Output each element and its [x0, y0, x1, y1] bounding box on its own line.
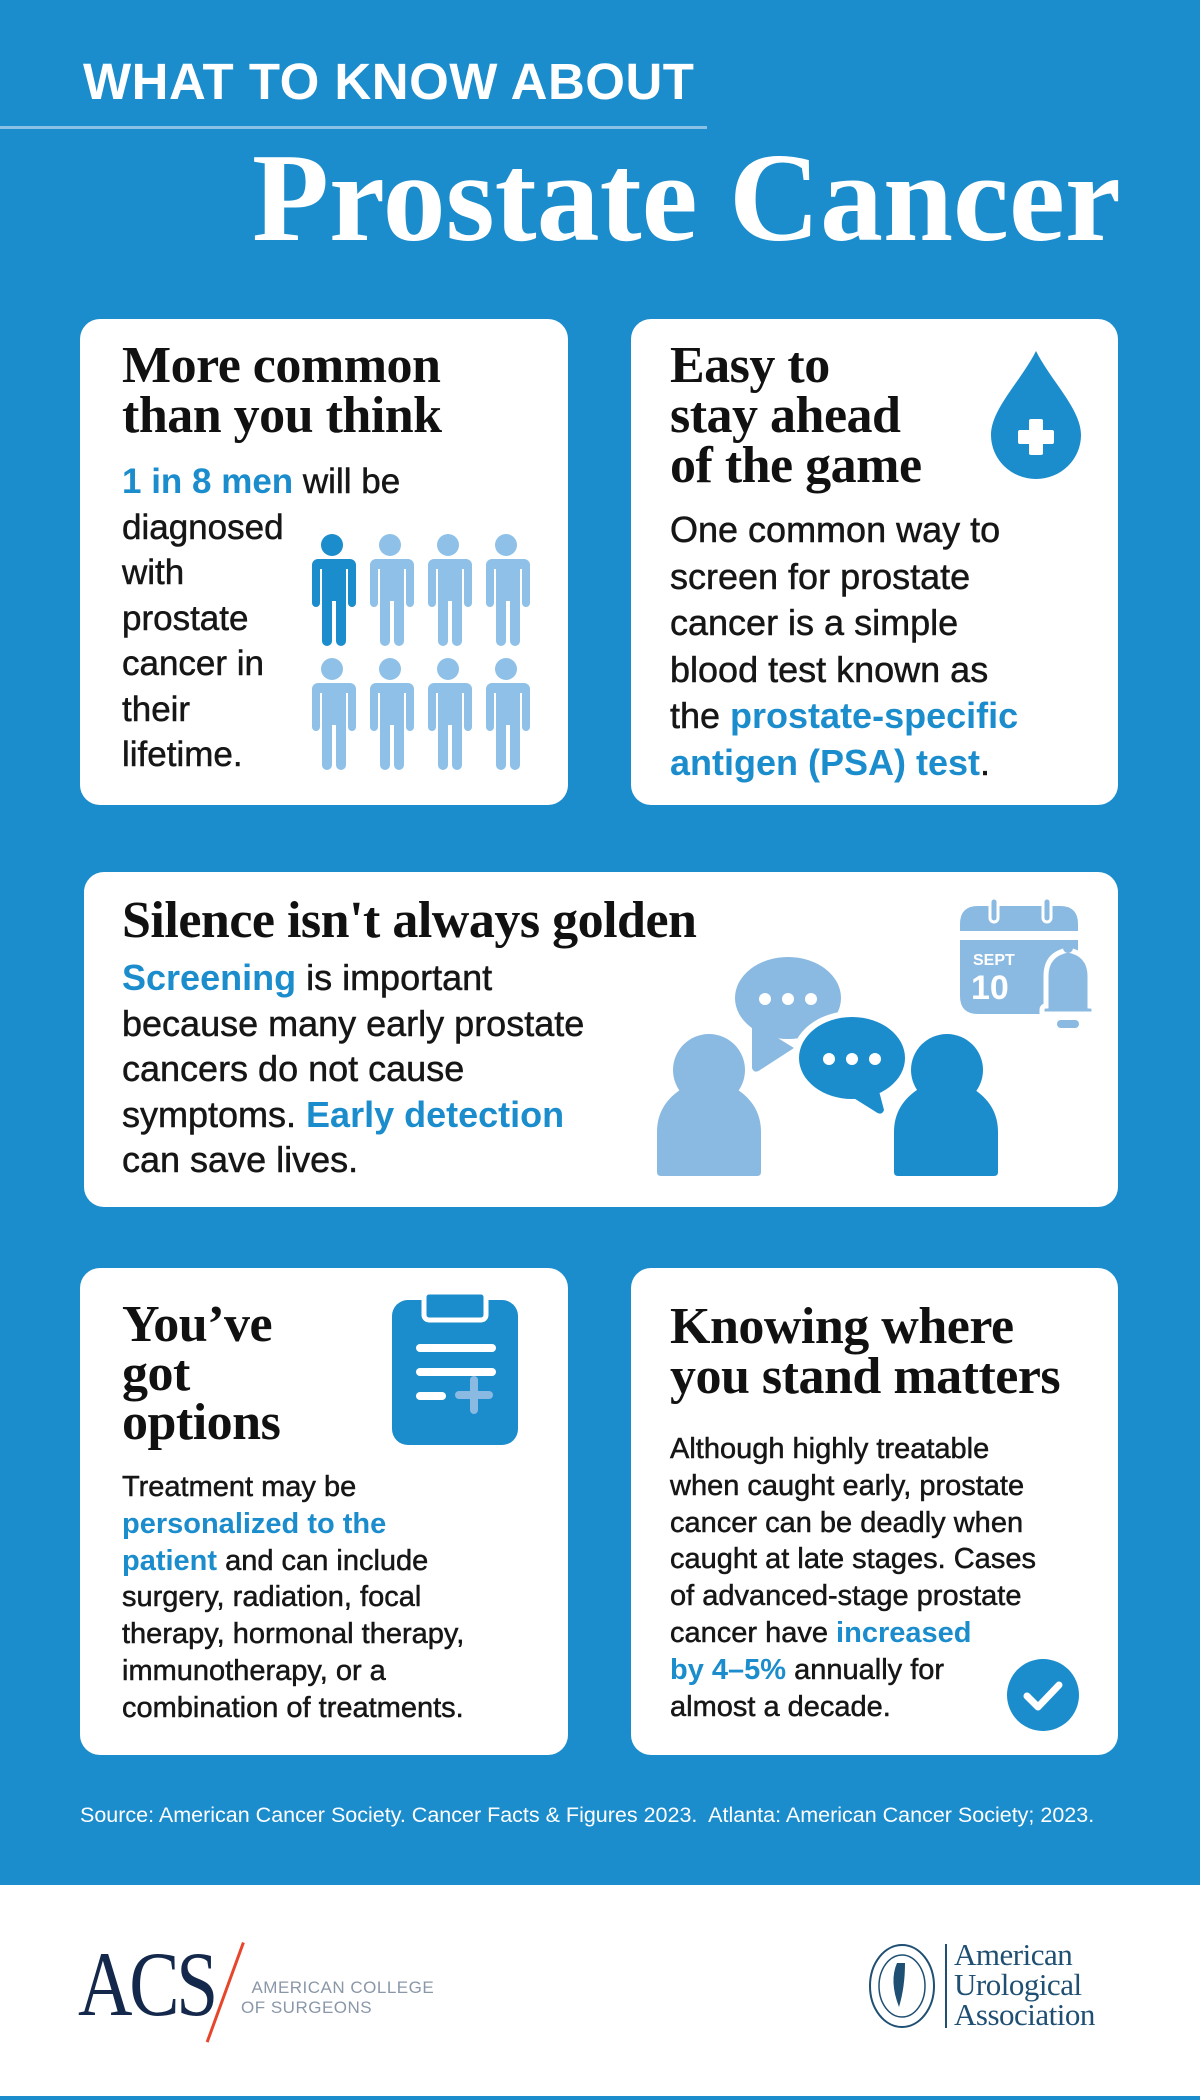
illustration: conversation: SEPT [973, 952, 1015, 969]
text block [670, 1433, 1036, 1723]
text block: patient and can include [122, 1545, 428, 1577]
text block: blood test known as [670, 648, 988, 690]
heading: Easy to [670, 337, 830, 394]
heading: you stand matters [670, 1348, 1060, 1405]
heading [122, 337, 442, 444]
dark bubble [792, 1011, 912, 1105]
heading: You’ve [122, 1296, 272, 1353]
logo: ACS [78, 1933, 434, 2043]
text block: antigen (PSA) test. [670, 742, 990, 782]
text block: their [122, 690, 190, 728]
text block [670, 509, 1018, 782]
text block: when caught early, prostate [670, 1470, 1024, 1502]
text block: screen for prostate [670, 556, 970, 596]
logo: ACS: OF SURGEONS [241, 1998, 372, 2017]
text block: therapy, hormonal therapy, [122, 1618, 464, 1650]
text block: can save lives. [122, 1139, 358, 1180]
heading [122, 1296, 280, 1451]
heading [670, 337, 922, 494]
heading: got [122, 1345, 190, 1402]
calendar [960, 906, 1078, 931]
illustration: conversation [657, 900, 1092, 1176]
logo: ACS: ACS [78, 1933, 215, 2035]
icon: 8 people [312, 534, 530, 770]
source text: Source: American Cancer Society. Cancer Facts & Figures 2023. Atlanta: American Cancer Society; 2023. [80, 1803, 1094, 1827]
title: what to know about: WHAT TO KNOW ABOUT [83, 53, 694, 110]
heading: stay ahead [670, 387, 900, 444]
text block: prostate [122, 598, 248, 638]
text block: cancer have increased [670, 1617, 971, 1649]
panel: silence isn't always golden [84, 872, 1118, 1207]
logo: ACS: AMERICAN COLLEGE [251, 1978, 434, 1997]
illustration: conversation: 10 [971, 969, 1009, 1007]
title: prostate cancer: Prostate Cancer [252, 129, 1121, 268]
icon: clipboard [392, 1294, 518, 1445]
heading: options [122, 1394, 280, 1451]
heading: of the game [670, 437, 922, 494]
heading [670, 1298, 1060, 1405]
heading: Knowing where [670, 1298, 1014, 1355]
text block: cancer is a simple [670, 602, 958, 643]
text block: personalized to the [122, 1508, 386, 1540]
text block: cancers do not cause [122, 1048, 464, 1089]
text block: because many early prostate [122, 1002, 584, 1044]
panel: you've got options [80, 1268, 568, 1755]
text block: Treatment may be [122, 1471, 356, 1503]
text block: with [122, 553, 184, 592]
text block: caught at late stages. Cases [670, 1543, 1036, 1575]
heading: More common [122, 337, 440, 394]
panel: more common than you think [80, 319, 568, 805]
text block: Although highly treatable [670, 1433, 989, 1465]
text block [122, 462, 400, 774]
text block: lifetime. [122, 735, 243, 774]
text block: One common way to [670, 509, 1000, 550]
text block: by 4–5% annually for [670, 1654, 944, 1686]
text block: combination of treatments. [122, 1692, 464, 1724]
logo: AUA: Urological [954, 1967, 1082, 2002]
text block: cancer in [122, 644, 264, 683]
heading: than you think [122, 387, 442, 444]
text block: almost a decade. [670, 1691, 891, 1723]
icon: check circle [1007, 1659, 1079, 1731]
text block: cancer can be deadly when [670, 1507, 1023, 1539]
text block: of advanced-stage prostate [670, 1580, 1021, 1612]
logo: AUA: American [954, 1937, 1072, 1972]
left person [673, 1034, 745, 1106]
panel: knowing where you stand [631, 1268, 1118, 1755]
light bubble [735, 957, 841, 1039]
text block: symptoms. Early detection [122, 1094, 564, 1134]
icon: blood drop [991, 351, 1081, 479]
logo: AUA [869, 1937, 1095, 2032]
right person [911, 1034, 983, 1106]
text block [122, 1471, 464, 1724]
bell [1042, 950, 1094, 1014]
text block: Screening is important [122, 957, 492, 998]
text block: diagnosed [122, 508, 284, 546]
text block: immunotherapy, or a [122, 1655, 386, 1687]
text block: the prostate-specific [670, 695, 1018, 736]
heading: Silence isn't always golden [122, 892, 696, 949]
logo: AUA: Association [954, 1997, 1095, 2032]
panel: easy to stay ahead [631, 319, 1118, 805]
text block: surgery, radiation, focal [122, 1581, 421, 1613]
text block: 1 in 8 men will be [122, 462, 400, 501]
text block [122, 957, 584, 1180]
